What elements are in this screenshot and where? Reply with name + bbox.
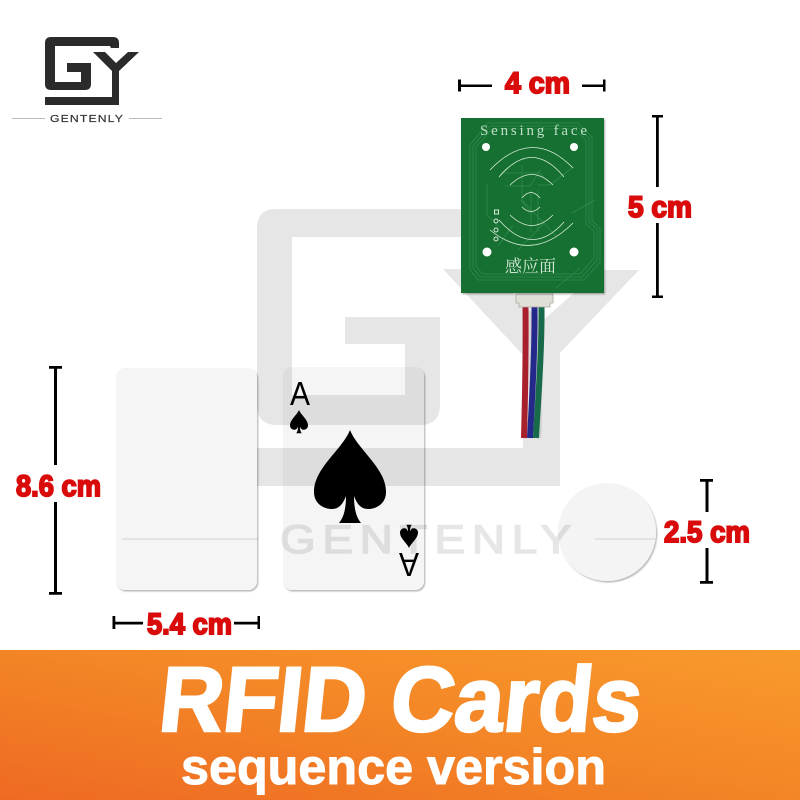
dimension: 5 cm: 5 cm — [628, 191, 692, 224]
subtitle: sequence version: sequence version — [181, 739, 606, 795]
card: blank white RFID card — [116, 368, 257, 590]
solder pads — [494, 210, 498, 241]
dimension: 5.4 cm — [112, 608, 260, 641]
dimension: 4 cm: 4 cm — [505, 67, 570, 100]
board label: Sensing face: Sensing face — [480, 123, 587, 139]
dimension: 8.6 cm: 8.6 cm — [16, 470, 101, 503]
dimension: 2.5 cm: 2.5 cm — [664, 516, 750, 549]
dimension: 5 cm — [628, 115, 692, 298]
orange title banner — [0, 647, 800, 800]
card: ace of spades: A — [290, 375, 310, 412]
background watermark logo: GENTENLY — [280, 518, 578, 562]
brand logo: GENTENLY — [50, 113, 124, 125]
mounting holes — [482, 143, 578, 256]
connector — [516, 294, 553, 307]
dimension: 5.4 cm: 5.4 cm — [147, 608, 232, 641]
PCB sensor board — [461, 118, 604, 293]
wires — [524, 306, 542, 438]
brand logo — [12, 37, 162, 125]
dimension: 4 cm — [458, 67, 606, 100]
dimension: 2.5 cm — [664, 479, 750, 584]
round RFID tag — [558, 483, 656, 581]
board label: Chinese: 感应面 — [505, 257, 556, 276]
title: RFID Cards: RFID Cards — [155, 647, 648, 751]
sensing arcs — [490, 147, 573, 245]
card: ace of spades: A — [399, 546, 419, 583]
board edge traces — [470, 123, 600, 288]
card: ace of spades — [283, 367, 424, 590]
dimension: 8.6 cm — [16, 366, 101, 595]
background watermark logo — [122, 209, 655, 562]
